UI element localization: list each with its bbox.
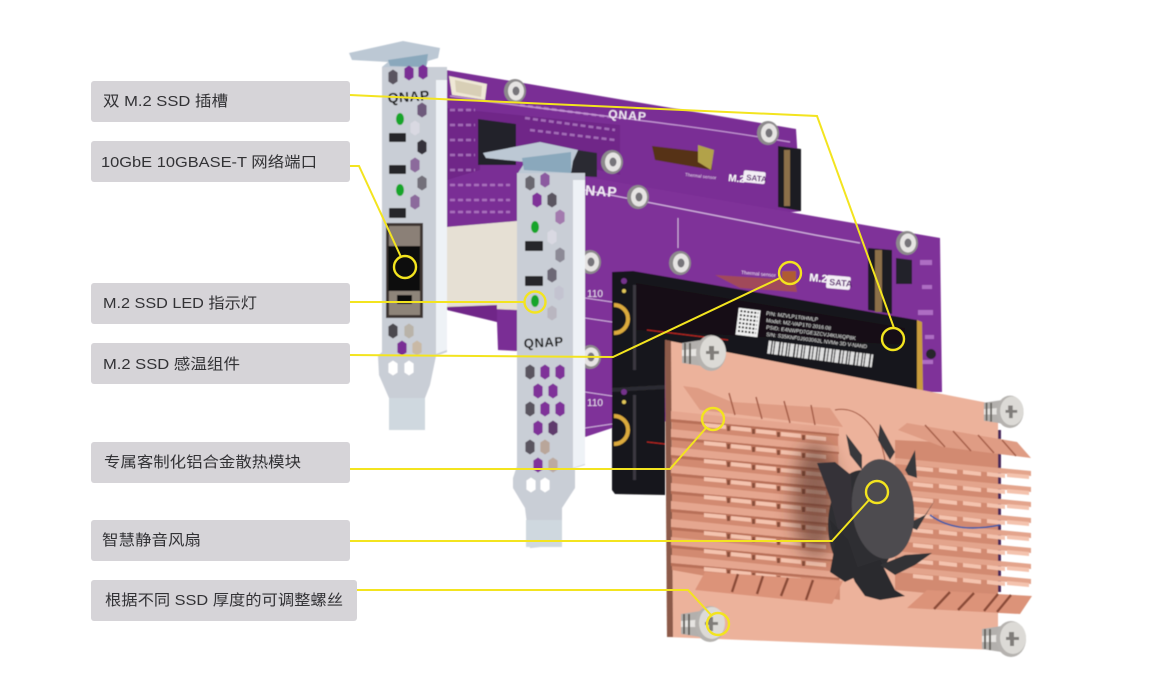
front card circuit board: 110 [587,398,603,409]
SSD label text: P/N: MZVLP1T0HMLP [766,311,819,323]
board logo: QNAP [608,107,647,124]
label: adjustable screws: 根据不同 SSD 厚度的可调整螺丝 [105,592,343,609]
board components [918,260,934,364]
front card circuit board: M.2 [809,272,828,286]
label: adjustable screws [91,580,357,621]
front card circuit board [573,175,942,437]
label: dual M.2 SSD slots: 双 M.2 SSD 插槽 [103,93,228,110]
fan wires [835,409,885,460]
callout leader lines and target rings [350,95,904,635]
leader: smart fan [350,500,869,541]
product photo: dual M.2 card with heatsink [349,41,1032,657]
M.2 SSD modules [612,271,923,495]
SSD label text [766,311,868,350]
top fin cap [683,386,843,427]
top fin cap [898,423,1031,458]
front PCIe bracket [483,142,585,548]
label: LED indicator: M.2 SSD LED 指示灯 [103,295,257,312]
QR code [735,308,761,337]
bottom fin cap [907,590,1032,614]
slot labels [525,241,543,286]
status LEDs [531,221,539,307]
leader: network port [350,166,401,257]
cooling fan [817,424,935,600]
label: heatsink: 专属客制化铝合金散热模块 [104,454,301,471]
label: thermal sensor: M.2 SSD 感温组件 [103,356,240,373]
leader: aluminium heatsink [350,428,706,469]
leader: thermal sensor [350,278,780,357]
slot labels [389,133,406,218]
leader: dual M.2 slots [350,95,894,328]
copper heatsink plate [665,340,998,650]
label: heatsink [91,442,350,483]
bracket logo: QNAP [387,87,430,106]
circuit traces [450,105,615,212]
M.2 slot [868,248,892,314]
bracket logo: QNAP [523,334,564,351]
back card circuit board: M.2 [728,173,746,186]
target rings [394,256,904,635]
back card circuit board: Thermal sensor [685,172,717,180]
ventilation holes [525,172,565,492]
front card circuit board: Thermal sensor [741,270,776,279]
label: dual M.2 SSD slots [91,81,350,122]
label: 10GbE port: 10GbE 10GBASE-T 网络端口 [101,154,317,171]
leader: LED [350,301,525,303]
back card circuit board: SATA [746,173,767,184]
callout labels [91,81,357,621]
SSD label text: S/N: S35KNF0J903062L NVMe 3D V-NAND [766,332,868,350]
label: LED indicator [91,283,350,324]
front card circuit board: SATA [829,277,853,289]
board logo: QNAP [573,181,618,200]
power connector [449,76,487,100]
SSD label text: Model: MZ-VAP1T0 2016.08 [766,318,831,332]
fan shadow on fins [793,442,837,558]
thumb screws [681,335,1026,657]
leader: adjustable screw [357,590,712,616]
back card circuit board [428,67,801,351]
barcode [768,347,873,361]
thermal sensor strip [715,275,797,292]
status LEDs [396,113,404,196]
RJ45 port [386,223,423,318]
bottom fin cap [695,572,843,604]
controller chip [478,119,516,165]
left fin block [671,386,843,604]
M.2 slot [778,146,801,211]
right fin block [895,423,1032,614]
RJ45 metal heat spreader [447,221,517,310]
label: thermal sensor [91,343,350,384]
ventilation holes [388,64,428,376]
label: 10GbE port [91,141,350,182]
back PCIe bracket [349,41,447,430]
thermal sensor strip [652,146,712,170]
SSD label text: PSID: E4NWPD7GE3ZCVJ4KU6QP8K [766,325,857,342]
label: smart fan [91,520,350,561]
length markers: 110 [587,289,603,300]
label: smart fan: 智慧静音风扇 [102,531,201,549]
